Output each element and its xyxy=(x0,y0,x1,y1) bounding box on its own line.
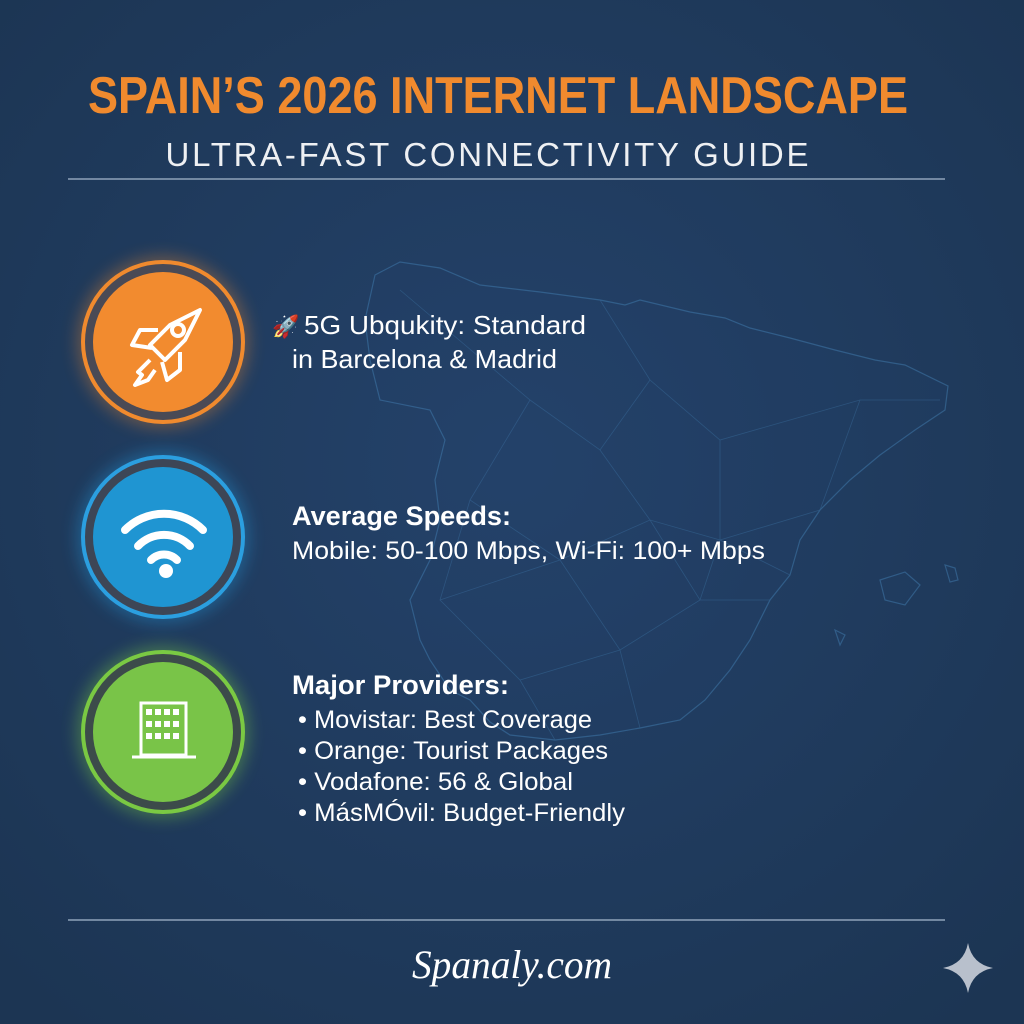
footer logo: Spanaly.com xyxy=(412,942,612,987)
text: speeds xyxy=(292,501,765,565)
icon: rocket circle xyxy=(77,256,249,428)
icon: sparkle xyxy=(943,943,993,993)
text: 5G: 🚀 xyxy=(272,314,299,339)
text: providers: • Movistar: Best Coverage xyxy=(298,706,592,734)
subtitle: ULTRA-FAST CONNECTIVITY GUIDE xyxy=(166,136,808,173)
title: SPAIN’S 2026 INTERNET LANDSCAPE xyxy=(88,67,908,125)
text: 5G xyxy=(272,310,586,374)
text: providers: • Vodafone: 56 & Global xyxy=(298,768,573,796)
text: 5G: 5G Ubqukity: Standard xyxy=(304,310,586,340)
text: providers: Major Providers: xyxy=(292,670,509,700)
text: providers xyxy=(292,670,626,827)
text: speeds: Mobile: 50-100 Mbps, Wi-Fi: 100+ Mbps xyxy=(292,537,765,565)
text: providers: • MásMÓvil: Budget-Friendly xyxy=(298,798,626,827)
icon: building circle xyxy=(77,646,249,818)
text: 5G: in Barcelona & Madrid xyxy=(292,344,557,374)
icon: wifi circle xyxy=(77,451,249,623)
text: providers: • Orange: Tourist Packages xyxy=(298,737,608,765)
map of spain network xyxy=(365,262,958,740)
text: speeds: Average Speeds: xyxy=(292,501,511,531)
